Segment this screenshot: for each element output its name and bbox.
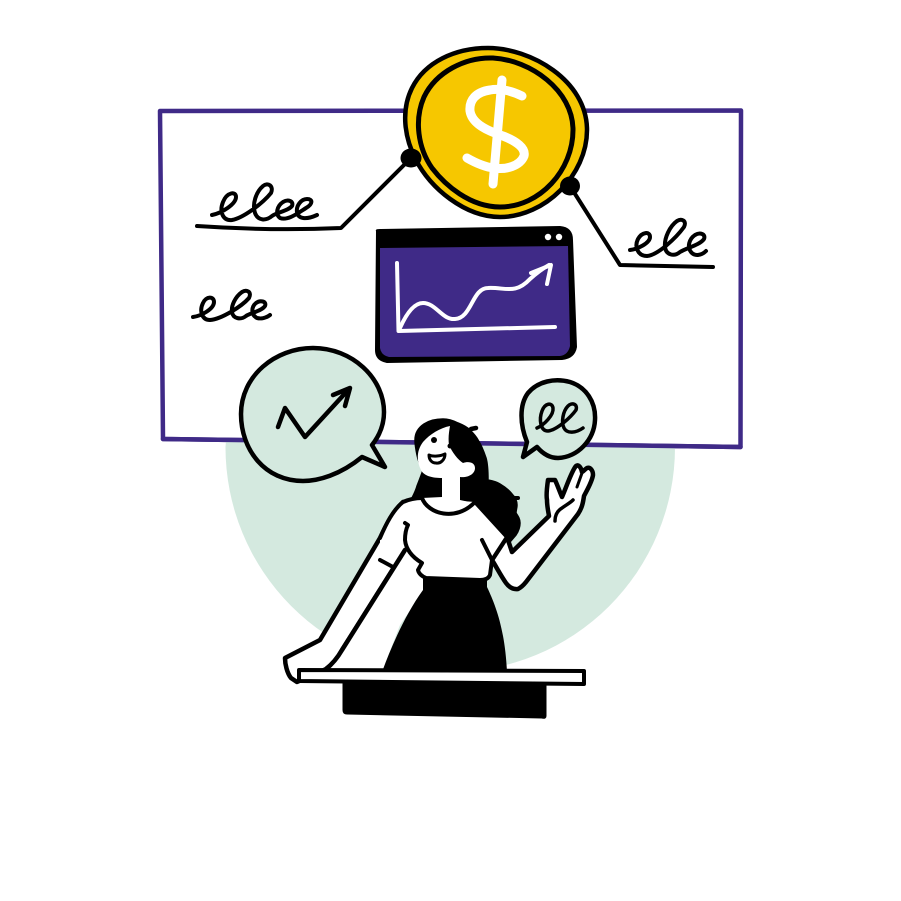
board bottom edge [163,439,740,447]
speech bubble right [522,380,595,458]
connector dot left [400,148,422,168]
palm line [555,500,573,521]
eye right [448,444,452,448]
coin [405,48,587,217]
waist fill [325,550,424,669]
right arm [492,465,593,589]
scribble label right [630,220,706,256]
coin outer [405,48,587,217]
sleeve seam left [380,560,393,567]
mouth [429,454,445,463]
shirt outline [380,498,507,580]
window frame [376,227,576,362]
scribble label middle left [193,291,270,320]
bubble shape [241,348,385,481]
chart axes [397,263,555,331]
coin inner ring [418,58,573,207]
scribble label top left [212,184,317,220]
shirt [380,498,507,580]
scribble [537,404,583,432]
hair [412,419,520,542]
browser window with chart [376,227,576,362]
finger line [577,473,582,487]
inner arm line [326,550,405,669]
skirt [382,578,507,672]
chart line [400,265,549,328]
presentation board [160,110,741,447]
hair tip [514,496,518,500]
dollar sign [467,80,524,184]
collar [422,498,475,514]
desk top [299,670,584,684]
connector line left [197,158,411,229]
connector line right [570,186,713,267]
connector dot right [560,176,580,196]
bubble shape [522,380,595,458]
chart arrow head [531,265,551,284]
left arm [285,502,405,682]
window dots [545,234,551,240]
desk base [343,682,546,718]
green background circle [225,441,675,672]
eye [431,437,437,443]
window screen [380,246,570,357]
hair clip [471,428,476,429]
sleeve seam right [482,540,492,560]
desk [299,670,584,718]
trend arrow [278,388,350,437]
woman [285,419,593,682]
face and neck [418,426,475,514]
speech bubble left [241,348,385,481]
